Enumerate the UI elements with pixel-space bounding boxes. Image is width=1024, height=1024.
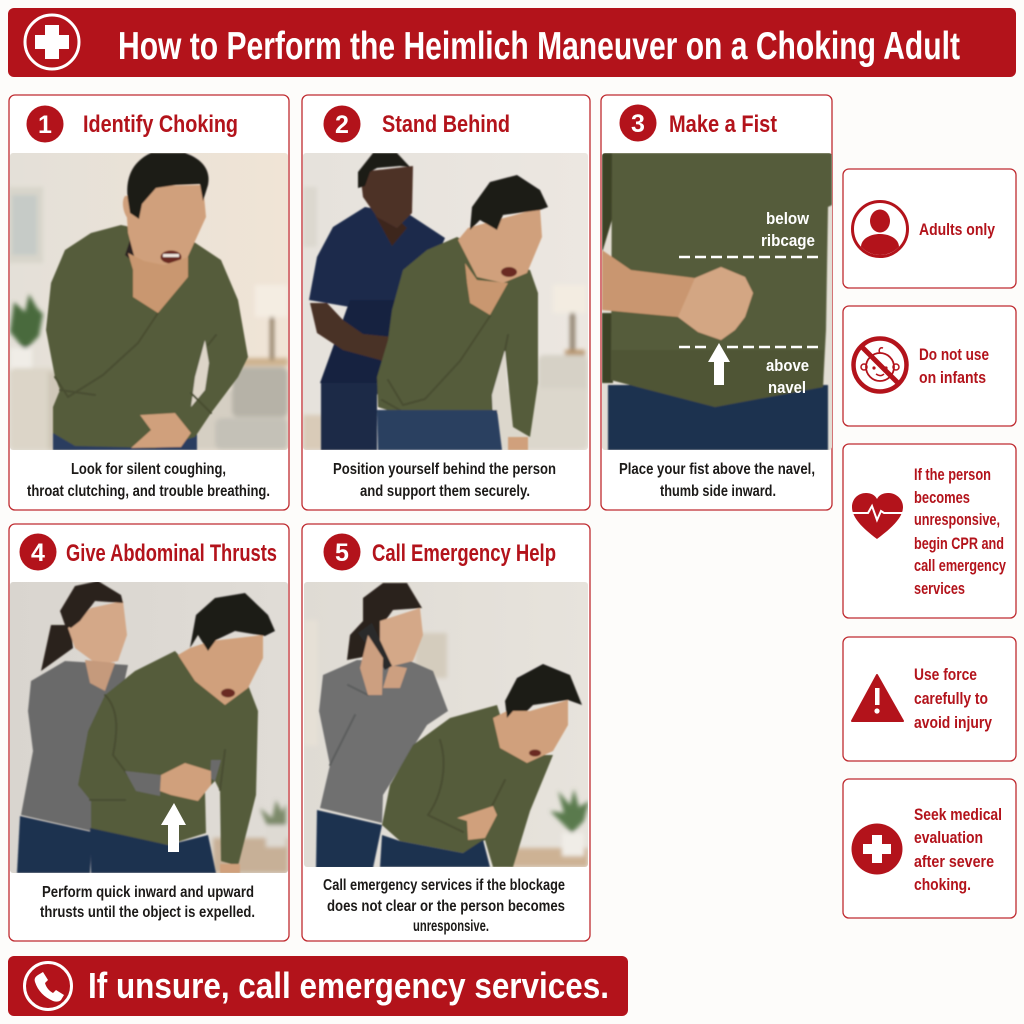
photo: fist placement on torso bbox=[602, 153, 832, 450]
step 5 heading: Call Emergency Help bbox=[372, 540, 556, 567]
step 4 caption: Perform quick inward and upward bbox=[42, 884, 254, 901]
step 2 caption bbox=[333, 461, 556, 500]
callout: do not use on infants bbox=[843, 306, 1016, 426]
icon: no infants bbox=[854, 338, 906, 392]
panel: step 5 call emergency help bbox=[302, 524, 590, 941]
badge 1: 1 bbox=[38, 111, 52, 139]
text: do not use on infants: on infants bbox=[919, 369, 986, 387]
text: seek medical evaluation bbox=[914, 806, 1002, 894]
label: below ribcage: below bbox=[766, 209, 810, 228]
panel: step 2 stand behind bbox=[302, 95, 590, 510]
callout: adults only bbox=[843, 169, 1016, 288]
text: do not use on infants bbox=[919, 346, 989, 387]
text: seek medical evaluation: after severe bbox=[914, 853, 994, 871]
icon: phone bbox=[24, 962, 72, 1010]
step 2 heading: Stand Behind bbox=[382, 111, 510, 138]
badge 3 bbox=[620, 104, 656, 142]
icon: warning triangle bbox=[852, 675, 903, 721]
text: seek medical evaluation: choking. bbox=[914, 876, 971, 894]
label: below ribcage bbox=[761, 209, 815, 250]
panel: step 3 make a fist bbox=[601, 95, 832, 510]
callout: use force carefully bbox=[843, 637, 1016, 761]
text: CPR instructions: becomes bbox=[914, 489, 970, 507]
icon: medical cross circle bbox=[852, 824, 902, 874]
badge 5: 5 bbox=[335, 539, 349, 567]
icon: heart with pulse bbox=[852, 493, 903, 539]
step 1 caption: Look for silent coughing, bbox=[71, 461, 226, 478]
step 3 caption bbox=[619, 461, 815, 500]
step 1 caption: throat clutching, and trouble breathing. bbox=[27, 483, 270, 500]
step 2 caption: Position yourself behind the person bbox=[333, 461, 556, 478]
step 3 caption: Place your fist above the navel, bbox=[619, 461, 815, 478]
step 1 caption bbox=[27, 461, 270, 500]
step 5 caption: unresponsive. bbox=[413, 918, 489, 935]
step 1 heading: Identify Choking bbox=[83, 111, 238, 138]
badge 2: 2 bbox=[335, 111, 349, 139]
step 3 caption: thumb side inward. bbox=[660, 483, 776, 500]
badge 4: 4 bbox=[31, 539, 45, 567]
step 5 caption: does not clear or the person becomes bbox=[327, 898, 565, 915]
footer text: If unsure, call emergency services. bbox=[88, 965, 609, 1006]
step 4 heading: Give Abdominal Thrusts bbox=[66, 540, 277, 567]
icon: adult bbox=[852, 202, 908, 257]
title banner bbox=[8, 8, 1016, 77]
text: CPR instructions: unresponsive, bbox=[914, 511, 1000, 529]
callout: seek medical evaluation bbox=[843, 779, 1016, 918]
text: seek medical evaluation: Seek medical bbox=[914, 806, 1002, 824]
badge 4 bbox=[20, 534, 56, 570]
text: use force carefully: avoid injury bbox=[914, 714, 993, 732]
step 5 caption bbox=[323, 877, 565, 935]
panel: step 1 identify choking bbox=[8, 95, 289, 510]
text: CPR instructions: If the person bbox=[914, 466, 991, 484]
text: CPR instructions bbox=[914, 466, 1007, 598]
text: adults only: Adults only bbox=[919, 221, 996, 239]
photo: woman calling for help bbox=[304, 582, 589, 868]
photo: man clutching throat bbox=[8, 153, 288, 450]
text: CPR instructions: services bbox=[914, 580, 965, 598]
arrow: upward placement bbox=[708, 343, 730, 385]
label: above navel bbox=[766, 356, 809, 397]
callout: CPR if unresponsive bbox=[843, 444, 1016, 618]
label: above navel: navel bbox=[768, 378, 806, 397]
panel: step 4 abdominal thrusts bbox=[9, 524, 289, 941]
step 4 caption bbox=[40, 884, 255, 921]
text: use force carefully: carefully to bbox=[914, 690, 988, 708]
step 4 caption: thrusts until the object is expelled. bbox=[40, 904, 255, 921]
badge 5 bbox=[324, 534, 360, 570]
icon: medical cross bbox=[25, 15, 79, 69]
label: below ribcage: ribcage bbox=[761, 231, 815, 250]
label: above navel: above bbox=[766, 356, 809, 375]
footer banner bbox=[8, 956, 628, 1016]
badge 1 bbox=[26, 106, 64, 142]
text: do not use on infants: Do not use bbox=[919, 346, 989, 364]
text: seek medical evaluation: evaluation bbox=[914, 829, 983, 847]
step 5 caption: Call emergency services if the blockage bbox=[323, 877, 565, 894]
text: use force carefully bbox=[914, 666, 993, 732]
badge 2 bbox=[324, 106, 360, 142]
dashed guide lines bbox=[679, 257, 818, 347]
photo: rescuer behind choking man bbox=[303, 153, 588, 450]
badge 3: 3 bbox=[631, 110, 645, 138]
photo: abdominal thrusts bbox=[10, 581, 288, 873]
step 2 caption: and support them securely. bbox=[360, 483, 530, 500]
text: use force carefully: Use force bbox=[914, 666, 977, 684]
step 3 heading: Make a Fist bbox=[669, 111, 777, 138]
